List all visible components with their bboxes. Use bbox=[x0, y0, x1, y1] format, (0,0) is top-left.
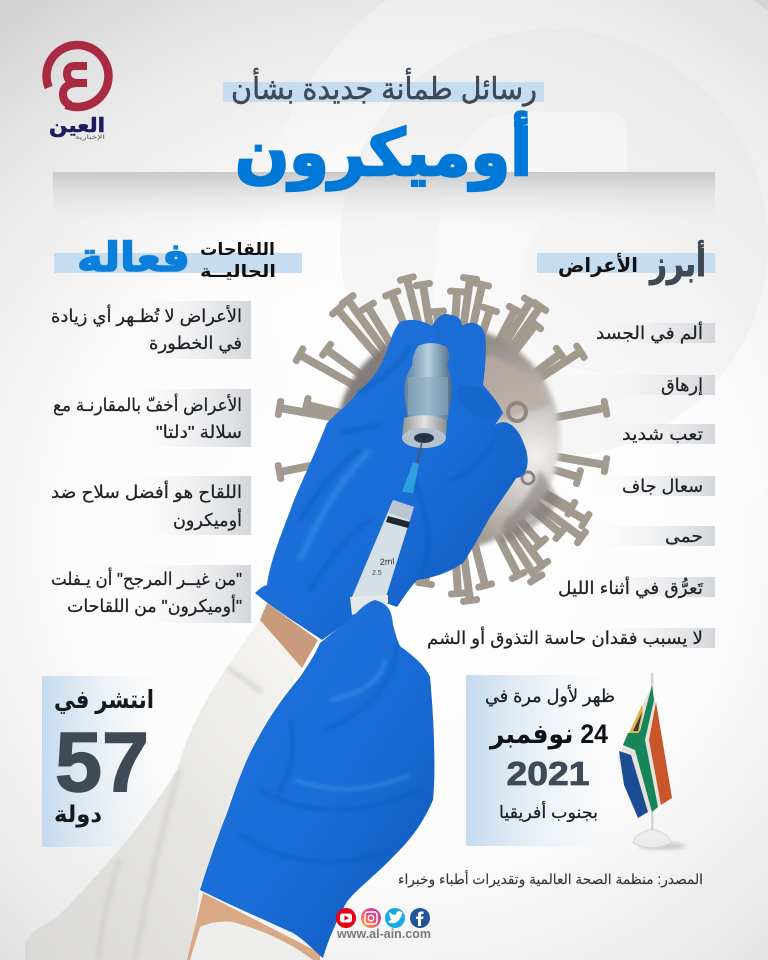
fact 1: الأعراض لا تُظـهر أي زيادة bbox=[51, 304, 242, 327]
fact 2 bbox=[53, 389, 251, 447]
logo: Al-Ain: العين bbox=[49, 115, 105, 137]
panel: first appearance date: ظهر لأول مرة في bbox=[485, 685, 615, 707]
source note: المصدر: منظمة الصحة العالمية وتقديرات أطباء وخبراء bbox=[398, 870, 703, 888]
lower arm sleeve and wrist bbox=[25, 603, 320, 960]
symptom: severe tiredness bbox=[590, 424, 715, 444]
symptom: no loss of taste or smell: لا يسبب فقدان حاسة التذوق أو الشم bbox=[427, 626, 703, 649]
symptom: fatigue: إرهاق bbox=[661, 375, 703, 395]
icon: twitter bbox=[385, 908, 405, 928]
panel: first appearance date: 2021 bbox=[506, 755, 590, 792]
fact 2: الأعراض أخفّ بالمقارنـة مع bbox=[53, 393, 242, 416]
icon: youtube bbox=[336, 908, 356, 928]
upper gloved hand bbox=[255, 315, 534, 640]
panel: first appearance date: بجنوب أفريقيا bbox=[499, 801, 598, 822]
symptom: dry cough bbox=[590, 476, 715, 496]
website: www.al-ain.com bbox=[336, 927, 431, 941]
fact 4: "من غيــر المرجح" أن يـفلت bbox=[51, 567, 242, 590]
fact 1 bbox=[51, 301, 251, 359]
symptom: dry cough: سعال جاف bbox=[622, 476, 703, 496]
fact 3 bbox=[51, 476, 251, 535]
symptom: fever: حمى bbox=[665, 526, 703, 546]
heading: top symptoms: أبرز bbox=[648, 240, 706, 285]
fact 2: سلالة "دلتا" bbox=[156, 422, 242, 442]
icon: facebook bbox=[410, 908, 430, 928]
syringe: 2.5 bbox=[372, 570, 382, 577]
symptom: night sweats: تَعرُّق في أثناء الليل bbox=[558, 576, 703, 599]
fact 3: أوميكرون bbox=[173, 508, 242, 531]
fact 3: اللقاح هو أفضل سلاح ضد bbox=[51, 480, 242, 503]
panel: spread in 57 countries: دولة bbox=[54, 801, 102, 828]
symptom: severe tiredness: تعب شديد bbox=[622, 424, 703, 444]
fact 1: في الخطورة bbox=[149, 333, 242, 354]
symptom: fever bbox=[590, 526, 715, 546]
panel: first appearance date: 24 نوفمبر bbox=[488, 719, 608, 750]
icon: South Africa table flag bbox=[618, 673, 686, 850]
symptom: body ache: ألم في الجسد bbox=[596, 321, 703, 344]
panel: first appearance date bbox=[466, 675, 624, 846]
heading: effective vaccines bbox=[54, 236, 302, 281]
thumb finger tip over vial bbox=[434, 314, 458, 346]
heading: top symptoms bbox=[537, 240, 715, 285]
heading: effective vaccines: اللقاحات bbox=[200, 240, 275, 259]
heading: top symptoms: الأعراض bbox=[558, 252, 638, 277]
logo: Al-Ain bbox=[46, 45, 108, 141]
lower gloved hand bbox=[200, 600, 434, 958]
virus illustration bbox=[280, 279, 605, 600]
fact 4: "أوميكرون" من اللقاحات bbox=[67, 594, 242, 617]
syringe bbox=[350, 442, 422, 615]
panel: spread in 57 countries: 57 bbox=[55, 715, 149, 809]
icon: instagram bbox=[361, 908, 381, 928]
main title: أوميكرون bbox=[235, 111, 532, 191]
symptoms list bbox=[427, 321, 715, 649]
title band bbox=[53, 172, 715, 230]
symptom: fatigue bbox=[600, 375, 715, 395]
heading: effective vaccines: الحاليــة bbox=[200, 262, 276, 281]
panel: spread in 57 countries: انتشر في bbox=[54, 686, 154, 715]
social icons and website bbox=[336, 908, 431, 941]
vial bbox=[402, 343, 452, 448]
heading: effective vaccines: فعالة bbox=[77, 236, 190, 280]
syringe: 2ml bbox=[380, 556, 395, 567]
panel: spread in 57 countries bbox=[42, 676, 167, 847]
subtitle: رسائل طمأنة جديدة بشأن bbox=[231, 67, 537, 106]
logo: Al-Ain: الإخبارية bbox=[75, 134, 105, 141]
vaccine facts list bbox=[51, 301, 251, 623]
fact 4 bbox=[51, 565, 251, 623]
